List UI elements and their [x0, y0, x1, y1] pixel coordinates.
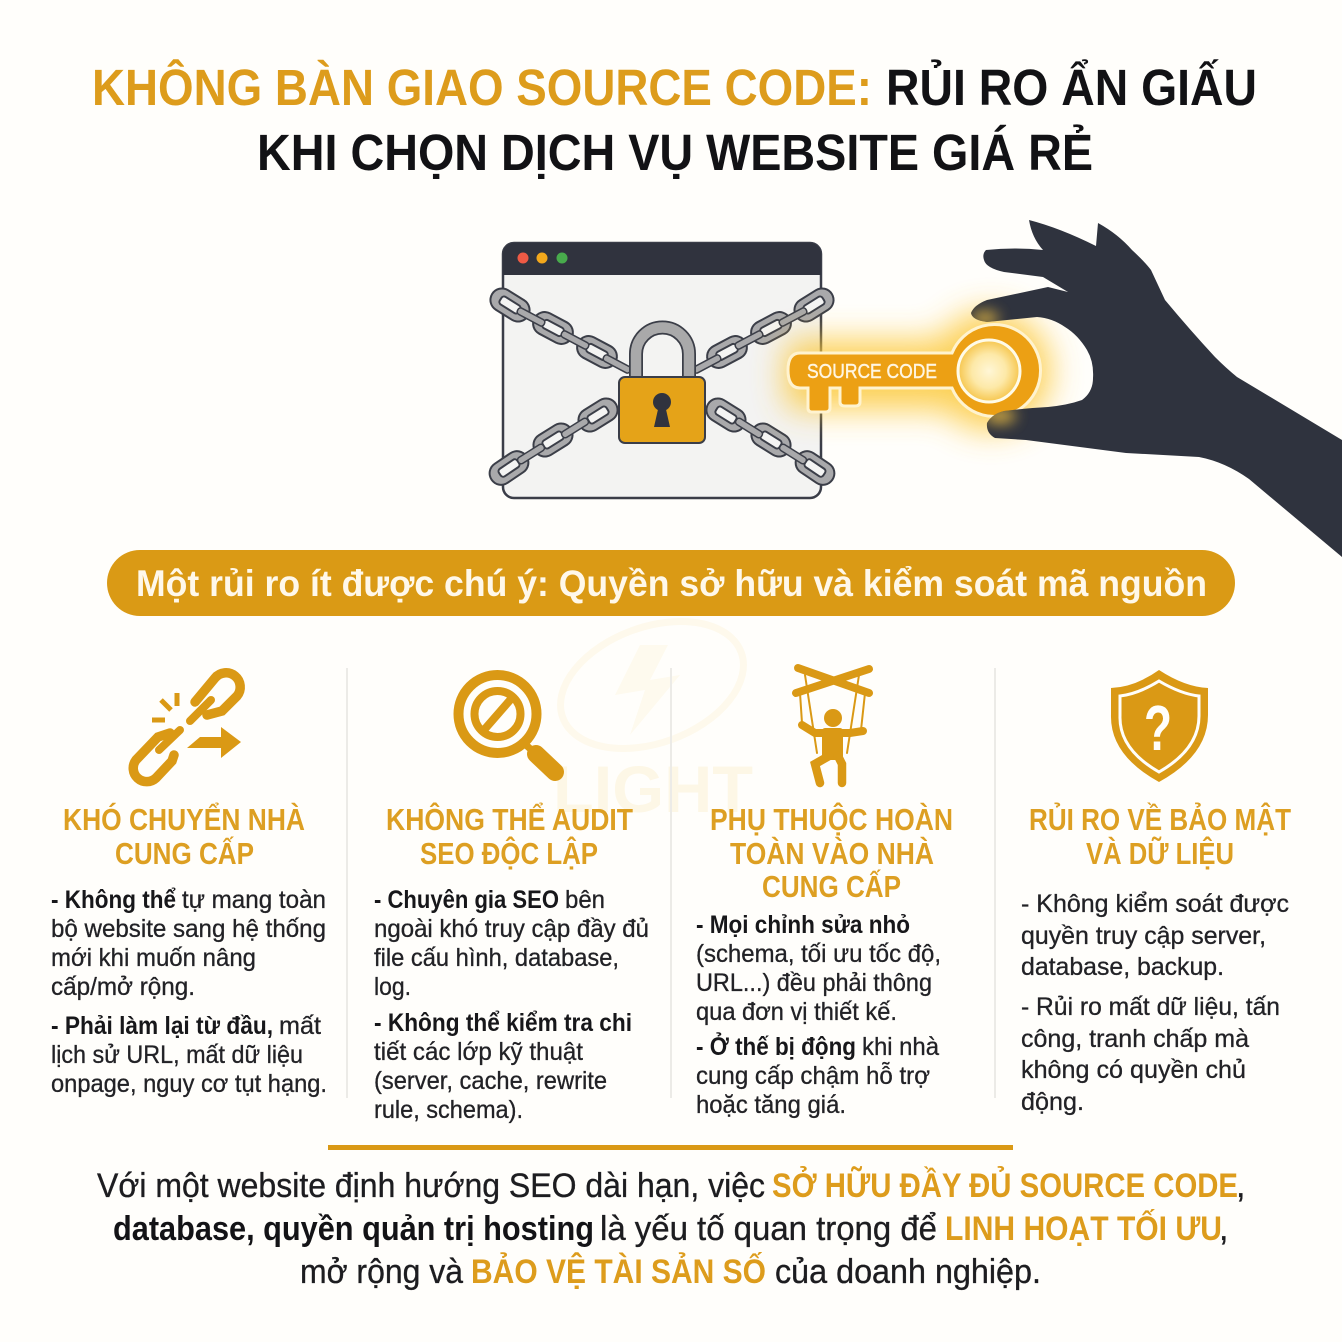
body text: file cấu hình, database,: [374, 944, 619, 972]
heading: KHÓ CHUYỂN NHÀ: [63, 801, 305, 837]
golden key: [788, 324, 1041, 417]
heading: KHÔNG THỂ AUDIT: [386, 801, 633, 837]
body text: qua đơn vị thiết kế.: [696, 998, 897, 1026]
body text: công, tranh chấp mà: [1021, 1025, 1249, 1053]
heading: PHỤ THUỘC HOÀN: [710, 801, 953, 837]
illustration: key and hand: [785, 220, 1342, 557]
heading: [1029, 801, 1291, 871]
body text: [51, 886, 327, 1098]
conclusion text: BẢO VỆ TÀI SẢN SỐ: [471, 1252, 766, 1291]
body text: - Rủi ro mất dữ liệu, tấn: [1021, 993, 1280, 1021]
conclusion text: mở rộng và: [300, 1253, 463, 1291]
conclusion text: SỞ HỮU ĐẦY ĐỦ SOURCE CODE: [772, 1167, 1238, 1205]
body text: động.: [1021, 1088, 1084, 1116]
heading: VÀ DỮ LIỆU: [1086, 835, 1234, 871]
body text: - Không thể kiểm tra chi: [374, 1009, 632, 1037]
body text: cấp/mở rộng.: [51, 973, 195, 1001]
body text: rule, schema).: [374, 1096, 523, 1124]
heading: [386, 801, 633, 871]
body text: log.: [374, 973, 411, 1001]
icon: magnifier with prohibition sign: [458, 675, 555, 772]
conclusion text: của doanh nghiệp.: [775, 1253, 1041, 1291]
conclusion text: ,: [1219, 1210, 1228, 1248]
title: KHI CHỌN DỊCH VỤ WEBSITE GIÁ RẺ: [257, 123, 1093, 181]
key glow: [785, 311, 1051, 431]
body text: lịch sử URL, mất dữ liệu: [51, 1041, 303, 1069]
body text: - Mọi chỉnh sửa nhỏ: [696, 911, 910, 939]
heading: [63, 801, 305, 871]
panel: Không thể audit SEO độc lập: [374, 675, 649, 1124]
conclusion text: database, quyền quản trị hosting: [113, 1210, 594, 1248]
body text: tự mang toàn: [182, 886, 326, 914]
banner: Một rủi ro ít được chú ý: Quyền sở hữu và kiểm soát mã nguồn: [136, 563, 1207, 604]
body text: khi nhà: [862, 1033, 939, 1061]
body text: - Không thể: [51, 886, 176, 914]
banner: [107, 550, 1235, 616]
chains: [484, 283, 840, 491]
conclusion text: LINH HOẠT TỐI ƯU: [945, 1209, 1222, 1248]
heading: [710, 801, 953, 904]
body text: database, backup.: [1021, 953, 1224, 981]
body text: hoặc tăng giá.: [696, 1091, 846, 1119]
body text: - Không kiểm soát được: [1021, 890, 1289, 918]
body text: bộ website sang hệ thống: [51, 915, 326, 943]
conclusion text: là yếu tố quan trọng để: [600, 1210, 937, 1248]
icon: marionette: [796, 668, 869, 783]
body text: - Phải làm lại từ đầu,: [51, 1012, 273, 1040]
panel: Khó chuyển nhà cung cấp: [51, 673, 327, 1098]
padlock: [619, 328, 705, 443]
body text: onpage, nguy cơ tụt hạng.: [51, 1070, 327, 1098]
heading: CUNG CẤP: [762, 869, 901, 904]
body text: (schema, tối ưu tốc độ,: [696, 940, 941, 968]
body text: tiết các lớp kỹ thuật: [374, 1038, 583, 1066]
body text: [374, 886, 649, 1124]
body text: [1021, 890, 1289, 1116]
body text: URL...) đều phải thông: [696, 969, 932, 997]
icon: shield with question mark: ?: [1144, 692, 1172, 764]
conclusion text: [97, 1167, 1245, 1291]
title: RỦI RO ẨN GIẤU: [886, 58, 1257, 116]
body text: - Ở thế bị động: [696, 1031, 856, 1061]
body text: cung cấp chậm hỗ trợ: [696, 1061, 930, 1090]
hand silhouette: [971, 220, 1342, 557]
watermark logo: LIGHT: [553, 752, 753, 826]
fingertip glow: [971, 311, 1016, 424]
browser window: [503, 243, 821, 498]
heading: RỦI RO VỀ BẢO MẬT: [1029, 801, 1291, 837]
body text: ngoài khó truy cập đầy đủ: [374, 915, 649, 943]
body text: - Chuyên gia SEO: [374, 886, 559, 914]
icon: broken chain: [133, 673, 241, 782]
heading: TOÀN VÀO NHÀ: [730, 836, 934, 871]
golden key: SOURCE CODE: [807, 361, 937, 383]
illustration: locked browser window with chains: [484, 243, 840, 498]
body text: mới khi muốn nâng: [51, 944, 256, 972]
heading: SEO ĐỘC LẬP: [420, 835, 598, 871]
body text: quyền truy cập server,: [1021, 922, 1266, 950]
body text: [696, 911, 941, 1119]
body text: bên: [565, 886, 605, 914]
heading: CUNG CẤP: [115, 836, 254, 871]
panel: Rủi ro về bảo mật và dữ liệu: [1021, 670, 1291, 1116]
conclusion text: ,: [1236, 1167, 1245, 1205]
body text: không có quyền chủ: [1021, 1056, 1246, 1084]
panel: Phụ thuộc hoàn toàn vào nhà cung cấp: [696, 668, 953, 1119]
icon: shield with question mark: [1111, 670, 1208, 782]
body text: mất: [279, 1012, 321, 1040]
title: [92, 58, 1257, 181]
body text: (server, cache, rewrite: [374, 1067, 607, 1095]
conclusion text: Với một website định hướng SEO dài hạn, việc: [97, 1167, 765, 1205]
watermark logo: [543, 598, 761, 826]
title: KHÔNG BÀN GIAO SOURCE CODE:: [92, 58, 872, 116]
